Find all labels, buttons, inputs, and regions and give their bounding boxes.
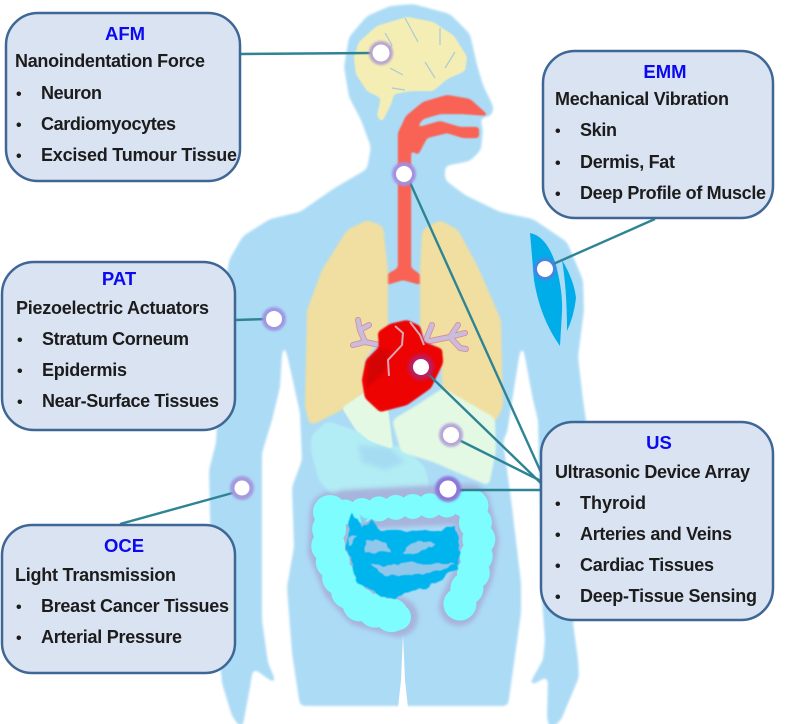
human body silhouette xyxy=(209,4,586,724)
organ: stomach xyxy=(311,421,430,510)
text block: US list: • xyxy=(555,496,561,513)
heading: US: US xyxy=(646,432,672,453)
text block: PAT list: • xyxy=(17,363,23,380)
text block: OCE list: • xyxy=(16,599,22,616)
panel: AFM xyxy=(6,13,240,181)
marker: muscle xyxy=(534,258,556,280)
text block: PAT list: Stratum Corneum xyxy=(42,329,189,349)
organ: large intestine xyxy=(328,504,479,617)
organ: small intestine xyxy=(346,512,462,598)
text block: EMM list xyxy=(555,89,766,203)
text block: US list: Thyroid xyxy=(580,493,646,513)
panel: PAT xyxy=(2,262,235,430)
marker: arm xyxy=(262,307,286,331)
text block: OCE list xyxy=(15,565,229,647)
organ: left lung xyxy=(305,220,388,426)
marker: heart xyxy=(408,354,434,380)
text block: PAT list: Epidermis xyxy=(42,360,127,380)
organ: right lung xyxy=(420,220,503,423)
text block: AFM list: Excised Tumour Tissue xyxy=(41,145,237,165)
marker: throat xyxy=(392,162,416,186)
marker: liver xyxy=(439,423,463,447)
organ: brain xyxy=(354,17,467,122)
marker: brain xyxy=(369,41,393,65)
marker: forearm xyxy=(230,476,254,500)
text block: EMM list: • xyxy=(555,123,561,140)
text block: OCE list: Arterial Pressure xyxy=(41,627,182,647)
text block: AFM list: Neuron xyxy=(41,83,102,103)
text block: AFM list: • xyxy=(16,117,22,134)
text block: PAT list xyxy=(16,298,219,411)
organ: heart xyxy=(353,320,466,412)
text block: EMM list: • xyxy=(555,186,561,203)
text block: OCE list: • xyxy=(16,630,22,647)
text block: PAT list: Near-Surface Tissues xyxy=(42,391,219,411)
heading: EMM: EMM xyxy=(643,61,687,82)
text block: US list: • xyxy=(555,589,561,606)
text block: AFM list: Cardiomyocytes xyxy=(41,114,176,134)
text block: US list: Deep-Tissue Sensing xyxy=(580,586,757,606)
text block: EMM list: Dermis, Fat xyxy=(580,152,675,172)
text block: AFM list: • xyxy=(16,148,22,165)
text block: US list: • xyxy=(555,558,561,575)
organ: arm muscle xyxy=(530,233,576,346)
text block: EMM list: Mechanical Vibration xyxy=(555,89,729,109)
text block: EMM list: • xyxy=(555,155,561,172)
organ: trachea and airway xyxy=(386,95,489,285)
text block: US list: Ultrasonic Device Array xyxy=(555,462,750,482)
text block: US list: • xyxy=(555,527,561,544)
organ: liver xyxy=(342,388,496,486)
text block: US list xyxy=(555,462,757,606)
text block: PAT list: • xyxy=(17,332,23,349)
panel: EMM xyxy=(543,51,773,218)
panel: US xyxy=(541,422,773,620)
text block: US list: Arteries and Veins xyxy=(580,524,732,544)
connector lines xyxy=(120,53,655,524)
text block: AFM list: Nanoindentation Force xyxy=(15,51,205,71)
heading: PAT: PAT xyxy=(102,268,137,289)
text block: PAT list: Piezoelectric Actuators xyxy=(16,298,209,318)
text block: OCE list: Light Transmission xyxy=(15,565,176,585)
organ: gallbladder xyxy=(442,496,460,510)
text block: EMM list: Deep Profile of Muscle xyxy=(580,183,766,203)
heading: AFM: AFM xyxy=(105,23,145,44)
text block: OCE list: Breast Cancer Tissues xyxy=(41,596,229,616)
panel: OCE xyxy=(2,525,235,673)
text block: PAT list: • xyxy=(17,394,23,411)
heading: OCE: OCE xyxy=(104,535,144,556)
text block: AFM list xyxy=(15,51,237,165)
text block: US list: Cardiac Tissues xyxy=(580,555,714,575)
text block: EMM list: Skin xyxy=(580,120,617,140)
text block: AFM list: • xyxy=(16,86,22,103)
marker: abdomen xyxy=(435,476,461,502)
